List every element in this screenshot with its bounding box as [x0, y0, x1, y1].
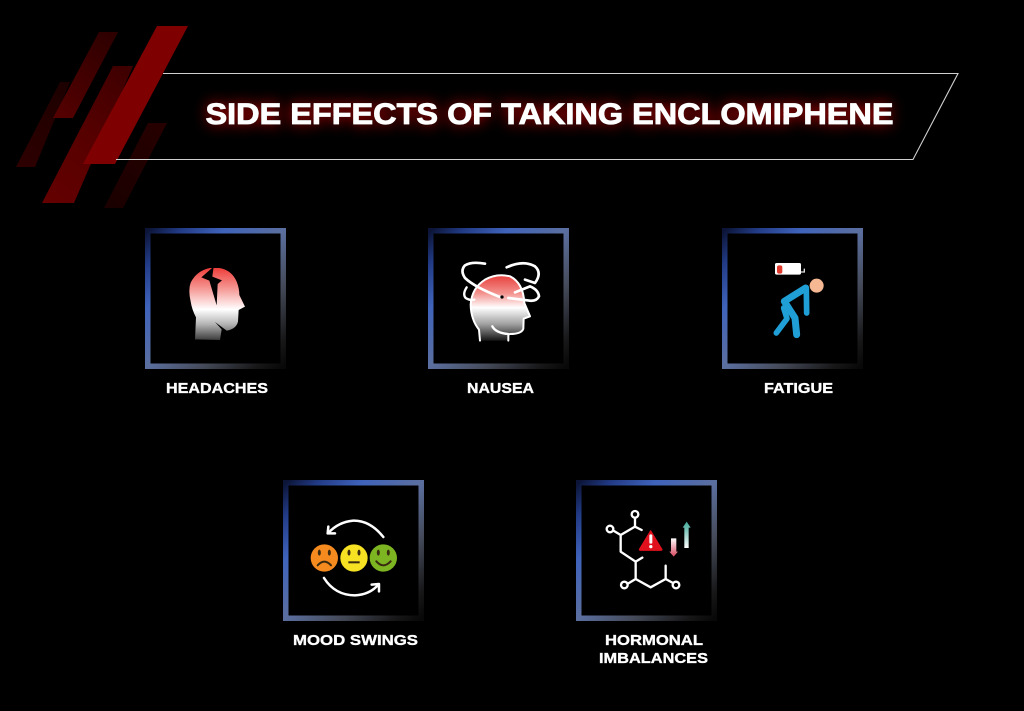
hormonal imbalances frame [579, 483, 714, 618]
icon: head with dizzy rings [462, 263, 539, 341]
decorative red stripes [16, 26, 188, 208]
panel: nausea [431, 231, 566, 397]
label: FATIGUE [764, 381, 833, 397]
label: MOOD SWINGS [293, 633, 418, 649]
mood swings frame [286, 483, 421, 618]
icon: molecule with warning and arrows [607, 511, 691, 588]
label [599, 633, 708, 667]
panel: headaches [148, 231, 283, 397]
panel: mood swings [286, 483, 421, 649]
panel: fatigue [725, 231, 860, 397]
fatigue frame [725, 231, 860, 366]
label: HEADACHES [166, 381, 268, 397]
icon: head with lightning bolt [189, 267, 245, 340]
icon: tired person with low battery [775, 263, 824, 335]
headaches frame [148, 231, 283, 366]
title banner outline [116, 74, 958, 160]
panel: hormonal imbalances [579, 483, 714, 667]
title: SIDE EFFECTS OF TAKING ENCLOMIPHENE [206, 98, 894, 131]
label: NAUSEA [467, 381, 535, 397]
icon: three mood faces with cycle arrows [311, 521, 397, 595]
nausea frame [431, 231, 566, 366]
label: HORMONAL [605, 633, 703, 649]
label: IMBALANCES [599, 651, 708, 667]
